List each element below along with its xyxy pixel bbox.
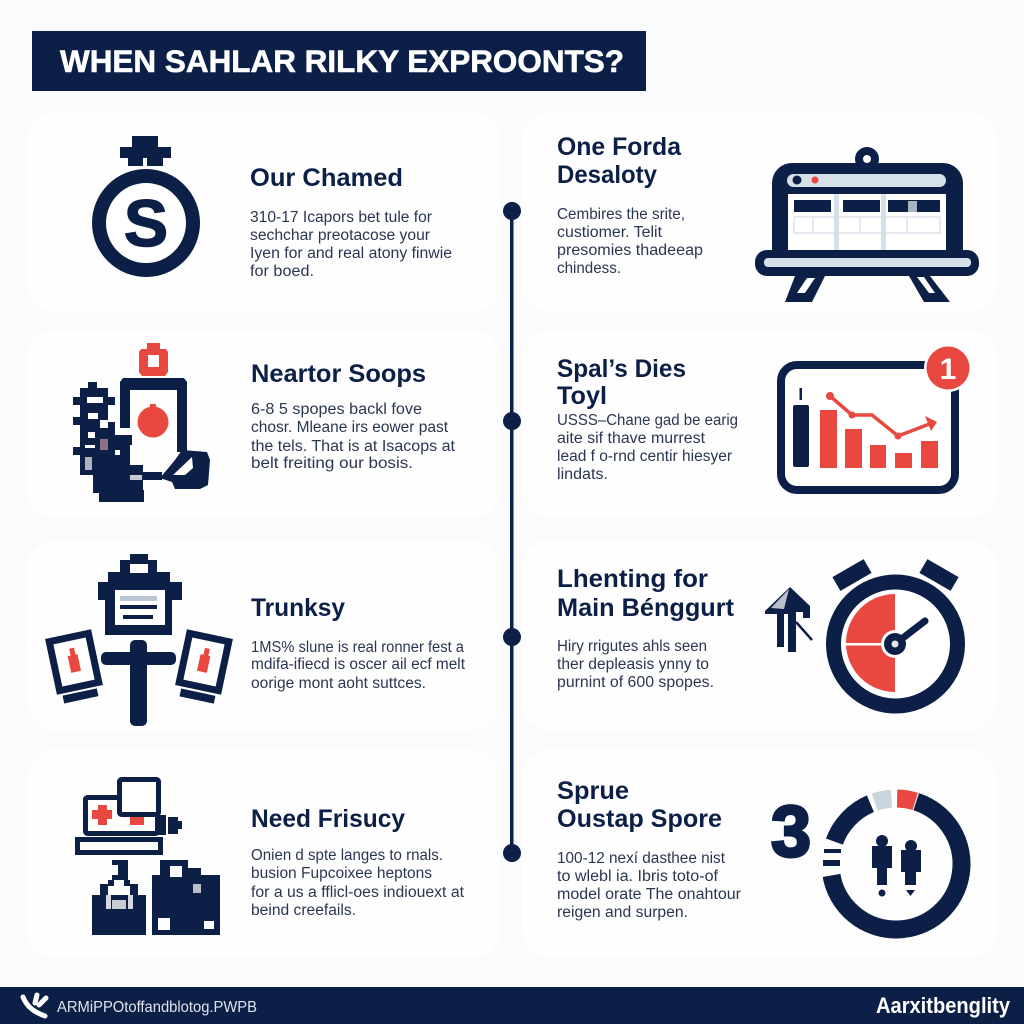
body text: mdifa-ifiecd is oscer ail ecf melt bbox=[251, 656, 466, 673]
timeline node 1 bbox=[503, 202, 521, 220]
icon: laptop dashboard bbox=[755, 151, 979, 302]
number three: 3 bbox=[771, 792, 811, 872]
panel: lhenting for main benggurt bbox=[522, 540, 997, 730]
icon: stopwatch gauge bbox=[832, 559, 959, 706]
body text: Iyen for and real atony finwie bbox=[250, 245, 452, 262]
panel: need frisucy bbox=[27, 750, 500, 958]
body text: Hiry rrigutes ahls seen bbox=[557, 638, 707, 655]
heading: Oustap Spore bbox=[557, 805, 722, 833]
body text: chindess. bbox=[557, 260, 621, 277]
body text: lead f o-rnd centir hiesyer bbox=[557, 448, 732, 465]
body text: chosr. Mleane irs eower past bbox=[251, 419, 449, 436]
footer address: ARMiPPOtoffandblotog.PWPB bbox=[57, 999, 257, 1016]
timeline node 4 bbox=[503, 844, 521, 862]
icon: ring with people bbox=[823, 798, 962, 930]
footer bar bbox=[0, 987, 1024, 1024]
heading bbox=[557, 777, 722, 833]
icon: money stopwatch: S bbox=[124, 186, 168, 260]
body text: oorige mont aoht suttces. bbox=[251, 675, 426, 692]
panel: trunksy bbox=[27, 540, 500, 730]
body text: to wlebl ia. Ibris toto-of bbox=[557, 868, 719, 885]
body text bbox=[557, 206, 703, 277]
body text: 6-8 5 spopes backl fove bbox=[251, 401, 422, 418]
body text: lindats. bbox=[557, 466, 608, 483]
icon: money stopwatch bbox=[99, 136, 193, 270]
body text: belt freiting our bosis. bbox=[251, 455, 413, 472]
heading: Our Chamed bbox=[250, 164, 403, 192]
body text: 1MS% slune is real ronner fest a bbox=[251, 639, 464, 656]
body text: for a us a fflicl-oes indiouext at bbox=[251, 884, 465, 901]
body text: Onien d spte langes to rnals. bbox=[251, 847, 443, 864]
panel: one forda desaloty bbox=[522, 112, 997, 312]
heading: Sprue bbox=[557, 777, 629, 805]
timeline node 2 bbox=[503, 412, 521, 430]
panel: our chamed bbox=[27, 112, 500, 312]
body text: the tels. That is at Isacops at bbox=[251, 438, 456, 455]
heading: Neartor Soops bbox=[251, 360, 426, 388]
timeline bbox=[503, 202, 521, 862]
body text bbox=[557, 850, 741, 921]
body text: ther depleasis ynny to bbox=[557, 656, 709, 673]
footer brand: Aarxitbenglity bbox=[876, 993, 1011, 1018]
body text: for boed. bbox=[250, 263, 314, 280]
body text bbox=[557, 638, 714, 691]
body text bbox=[557, 412, 738, 483]
title banner bbox=[32, 31, 646, 91]
body text: busion Fupcoixee heptons bbox=[251, 865, 432, 882]
icon: up arrow bbox=[765, 587, 812, 652]
heading bbox=[557, 355, 686, 410]
icon: document signpost bbox=[49, 554, 229, 726]
body text: purnint of 600 spopes. bbox=[557, 674, 714, 691]
body text: sechchar preotacose your bbox=[250, 227, 430, 244]
body text: aite sif thave murrest bbox=[557, 430, 706, 447]
heading: Desaloty bbox=[557, 161, 657, 189]
body text: USSS–Chane gad be earig bbox=[557, 412, 738, 429]
body text: beind creefails. bbox=[251, 902, 356, 919]
body text bbox=[251, 847, 465, 919]
panel: sprue oustap spore bbox=[522, 750, 997, 958]
body text bbox=[251, 639, 466, 692]
heading: Lhenting for bbox=[557, 565, 708, 593]
timeline node 3 bbox=[503, 628, 521, 646]
panel: neartor soops bbox=[27, 330, 500, 518]
body text: 310-17 Icapors bet tule for bbox=[250, 209, 432, 226]
heading bbox=[557, 565, 735, 622]
body text: model orate The onahtour bbox=[557, 886, 741, 903]
heading: Toyl bbox=[557, 382, 607, 410]
panel: spal's dies toyl bbox=[522, 330, 997, 518]
heading bbox=[557, 133, 682, 189]
body text: reigen and surpen. bbox=[557, 904, 688, 921]
heading: One Forda bbox=[557, 133, 682, 161]
icon: bar chart with alert badge: 1 bbox=[940, 353, 956, 386]
heading: Need Frisucy bbox=[251, 805, 405, 833]
body text bbox=[250, 209, 452, 280]
body text: 100-12 nexí dasthee nist bbox=[557, 850, 726, 867]
body text: Cembires the srite, bbox=[557, 206, 685, 223]
title banner: WHEN SAHLAR RILKY EXPROONTS? bbox=[60, 43, 624, 79]
body text bbox=[251, 401, 456, 472]
icon: computer and bags bbox=[75, 780, 220, 935]
body text: custiomer. Telit bbox=[557, 224, 663, 241]
icon: phone with tools bbox=[73, 343, 210, 502]
heading: Trunksy bbox=[251, 594, 345, 622]
body text: presomies thadeeap bbox=[557, 242, 703, 259]
icon: phone handset bbox=[23, 995, 46, 1016]
heading: Spal’s Dies bbox=[557, 355, 686, 383]
icon: bar chart with alert badge bbox=[781, 344, 972, 490]
heading: Main Bénggurt bbox=[557, 594, 735, 622]
